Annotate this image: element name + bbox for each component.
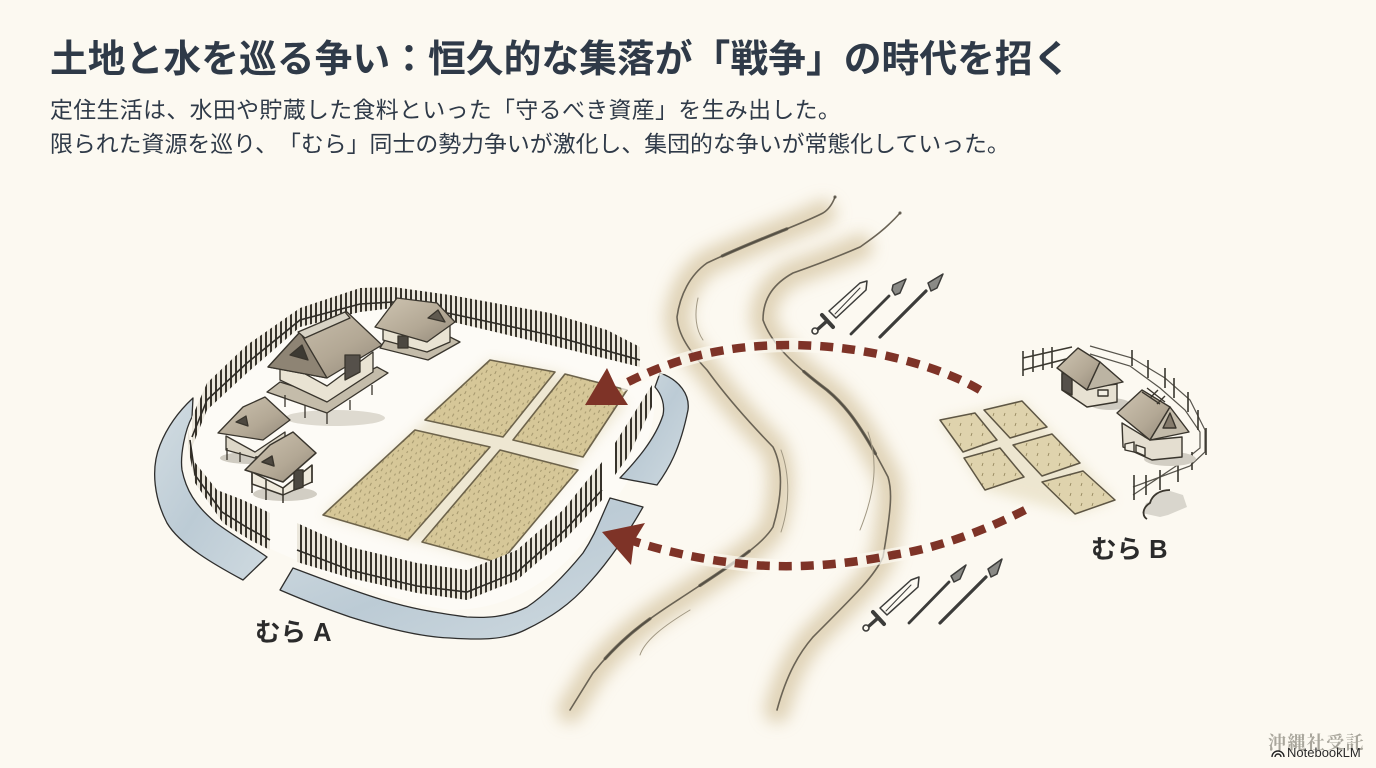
house B1 bbox=[1057, 348, 1130, 410]
main house bbox=[267, 312, 388, 426]
label: mura B: むら B bbox=[1091, 536, 1168, 564]
icon: weapons bottom (sword and two spears) bbox=[863, 559, 1002, 631]
rice field glow bbox=[323, 360, 627, 563]
watermark: 沖縄社受託 bbox=[1268, 733, 1365, 753]
subtitle text block: 定住生活は、水田や貯蔵した食料といった「守るべき資産」を生み出した。 bbox=[50, 97, 841, 123]
field glow bbox=[940, 401, 1115, 514]
house front bbox=[245, 432, 317, 503]
subtitle text block bbox=[50, 97, 1010, 157]
wooden fence bbox=[1023, 346, 1206, 500]
subtitle text block: 限られた資源を巡り、「むら」同士の勢力争いが激化し、集団的な争いが常態化していった。 bbox=[50, 131, 1010, 157]
moat bbox=[155, 373, 688, 639]
village B bbox=[940, 346, 1206, 564]
arrow: top attack from village B to A bbox=[585, 345, 980, 405]
storehouse top bbox=[375, 298, 460, 360]
house left bbox=[218, 397, 290, 466]
label: mura A: むら A bbox=[255, 619, 332, 647]
river bbox=[570, 197, 900, 710]
rice fields bbox=[323, 360, 627, 563]
title: 土地と水を巡る争い：恒久的な集落が「戦争」の時代を招く bbox=[50, 39, 1071, 81]
village A ground bbox=[190, 305, 654, 610]
small rice fields bbox=[940, 401, 1115, 514]
fence rails bbox=[190, 302, 640, 592]
icon: weapons top (sword and two spears) bbox=[812, 274, 943, 337]
rock bbox=[1142, 490, 1187, 519]
village A bbox=[155, 287, 688, 647]
arrow: bottom attack from village B to A bbox=[602, 510, 1025, 566]
house B2 bbox=[1117, 388, 1196, 466]
palisade fence bbox=[188, 287, 652, 600]
watermark: NotebookLM bbox=[1287, 745, 1361, 760]
